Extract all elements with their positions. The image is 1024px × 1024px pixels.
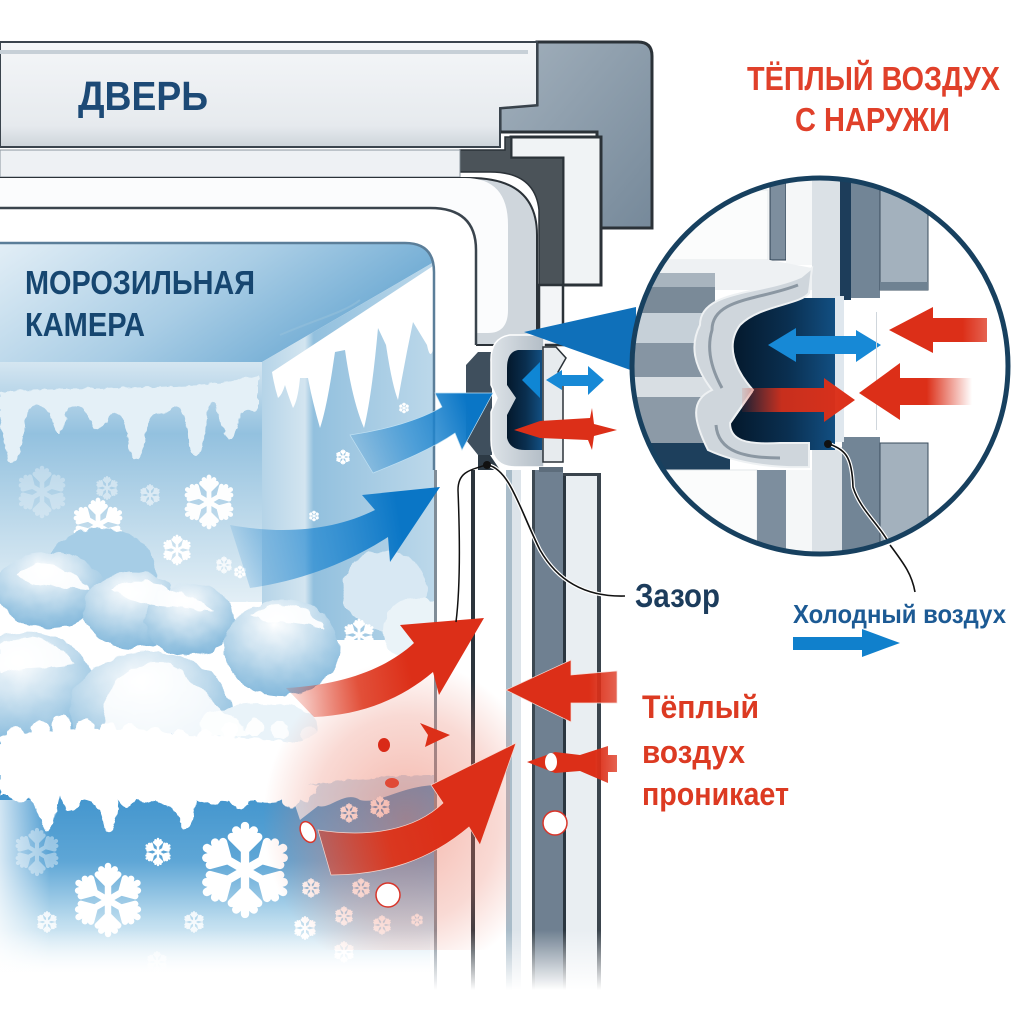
label: freezer chamber: МОРОЗИЛЬНАЯ <box>25 264 255 301</box>
outer grey seal profile <box>500 42 652 228</box>
white L profile <box>511 137 601 285</box>
frost band <box>0 715 434 832</box>
small gasket <box>466 335 566 472</box>
blue wedge to magnifier <box>524 307 636 372</box>
snow boulders <box>0 527 434 744</box>
white frame <box>0 178 508 333</box>
frame curves <box>0 178 537 345</box>
frost over haze <box>296 775 434 820</box>
outer red arrows <box>889 307 987 353</box>
back wall <box>0 362 262 602</box>
icicles under band <box>0 785 320 832</box>
gap leader lines <box>456 461 915 622</box>
red arrows: warm air <box>286 618 617 907</box>
label: freezer chamber: КАМЕРА <box>25 306 145 343</box>
cavity arrows <box>768 328 881 362</box>
title: door: ДВЕРЬ <box>78 73 208 119</box>
label: warm air enters: Тёплый <box>642 689 759 725</box>
label: warm air enters: воздух <box>642 734 745 770</box>
magnifier circle <box>625 175 1008 580</box>
second band <box>0 150 460 177</box>
label: warm air from outside <box>747 59 1000 138</box>
label: freezer chamber <box>25 264 255 343</box>
label: warm air enters <box>642 689 789 812</box>
snowflakes lower <box>15 620 423 972</box>
small arrows <box>514 362 617 450</box>
lower door rails <box>430 470 610 990</box>
snowflakes upper <box>18 403 409 614</box>
lower blue zone <box>0 775 434 960</box>
gasket body <box>694 268 812 467</box>
dark L profile <box>460 137 563 285</box>
gasket cavity <box>730 298 835 450</box>
right wall icicles <box>272 266 433 428</box>
warm haze over chamber and door edge <box>250 660 510 950</box>
inner frame <box>0 208 476 347</box>
door panel <box>0 42 537 147</box>
panel: freezer chamber <box>0 243 453 990</box>
legend: cold air: Холодный воздух <box>793 599 1006 629</box>
label: warm air from outside: С НАРУЖИ <box>795 101 950 138</box>
ceiling <box>0 243 434 362</box>
right wall <box>262 262 434 640</box>
label: warm air enters: проникает <box>642 776 789 812</box>
label: gap: Зазор <box>635 577 720 614</box>
back wall icicles <box>0 376 258 462</box>
zoom gap leader <box>830 442 888 540</box>
blue arrows: cold air <box>230 393 493 588</box>
legend: cold air <box>793 599 1006 657</box>
frame white margin beside chamber <box>436 345 472 470</box>
